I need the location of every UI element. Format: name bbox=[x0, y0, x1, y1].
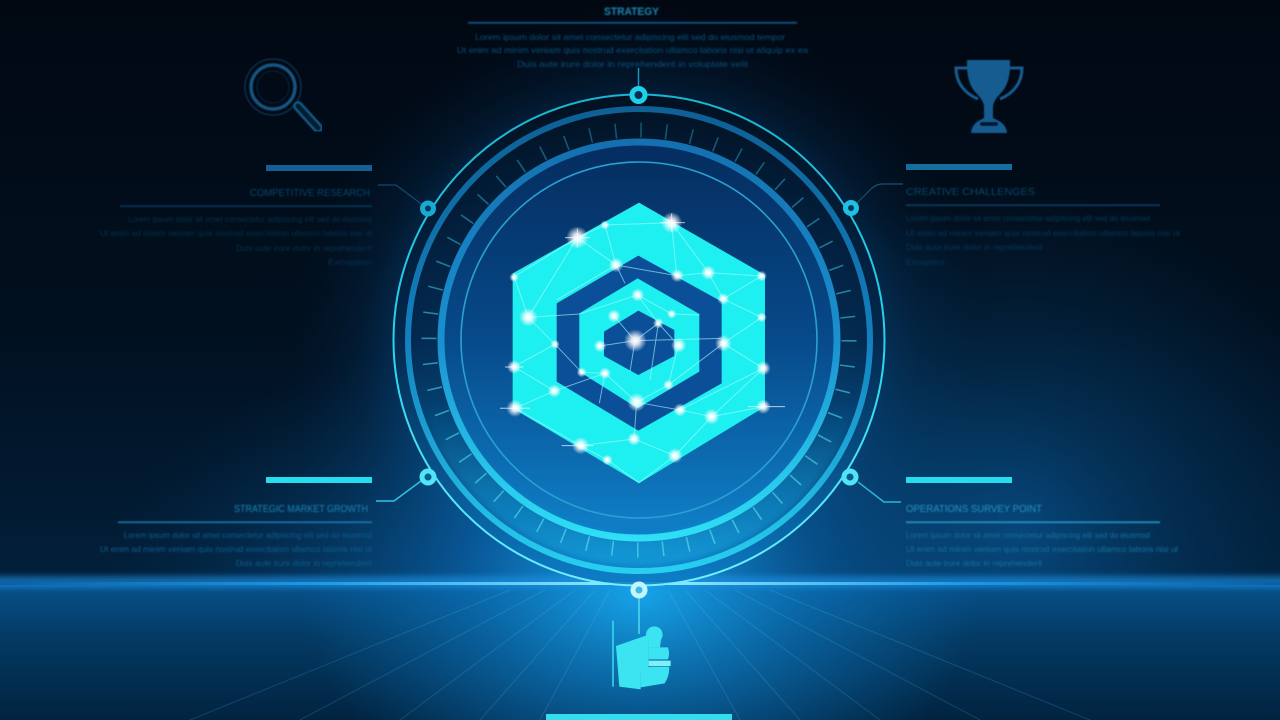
body text: Ut enim ad minim veniam quis nostrud exercitation ullamco laboris nisi ut bbox=[906, 228, 1181, 238]
body text: Duis aute irure dolor in reprehenderit bbox=[236, 558, 373, 568]
body text: Lorem ipsum dolor sit amet consectetur adipiscing elit sed do eiusmod bbox=[906, 213, 1150, 223]
spark flares bbox=[500, 213, 785, 446]
connector and node: bottom left bbox=[376, 471, 434, 501]
body text bbox=[457, 32, 808, 69]
body text bbox=[906, 213, 1181, 267]
body text bbox=[100, 214, 373, 267]
top block: strategy bbox=[457, 6, 808, 69]
hexagon network logo bbox=[500, 203, 785, 483]
body text: Excepteur bbox=[906, 257, 945, 267]
icon: magnifying glass bbox=[245, 59, 318, 128]
body text: Duis aute irure dolor in reprehenderit bbox=[906, 242, 1044, 252]
body text: Lorem ipsum dolor sit amet consectetur adipiscing elit sed do eiusmod tempor bbox=[475, 32, 785, 42]
connector and node: bottom right bbox=[844, 471, 901, 502]
body text: Duis aute irure dolor in reprehenderit bbox=[236, 243, 373, 253]
body text: Duis aute irure dolor in reprehenderit in voluptate velit bbox=[517, 59, 749, 69]
body text bbox=[906, 530, 1179, 568]
outer thin ring bbox=[394, 94, 884, 586]
heading: STRATEGY bbox=[604, 6, 660, 18]
lower ring glow bbox=[427, 128, 851, 552]
second ring bbox=[408, 109, 870, 571]
body text: Lorem ipsum dolor sit amet consectetur adipiscing elit sed do eiusmod bbox=[124, 530, 372, 540]
central dial bbox=[394, 94, 884, 586]
body text bbox=[100, 530, 373, 568]
body text: Ut enim ad minim veniam quis nostrud exercitation ullamco laboris nisi ut bbox=[100, 228, 373, 238]
panel: bottom left bbox=[100, 477, 373, 568]
floor with perspective grid bbox=[0, 576, 1280, 720]
heading: COMPETITIVE RESEARCH bbox=[250, 188, 370, 199]
horizon beam bbox=[0, 576, 1280, 588]
inner thin ring bbox=[461, 162, 817, 518]
connector and node: bottom bbox=[633, 584, 645, 634]
body text: Ut enim ad minim veniam quis nostrud exercitation ullamco laboris nisi ut bbox=[100, 544, 373, 554]
connector and node: top left bbox=[378, 185, 434, 214]
panel: top left bbox=[100, 165, 373, 267]
mesh lines bbox=[514, 223, 763, 483]
body text: Duis aute irure dolor in reprehenderit bbox=[906, 558, 1043, 568]
body text: Lorem ipsum dolor sit amet consectetur adipiscing elit sed do eiusmod bbox=[128, 214, 372, 224]
thick inner ring bbox=[441, 142, 837, 538]
body text: Ut enim ad minim veniam quis nostrud exercitation ullamco laboris nisi ut bbox=[906, 544, 1179, 554]
body text: Ut enim ad minim veniam quis nostrud exercitation ullamco laboris nisi ut aliquip ex ea bbox=[457, 45, 808, 55]
glowing nodes bbox=[506, 212, 771, 465]
panel: top right bbox=[906, 164, 1181, 267]
heading: OPERATIONS SURVEY POINT bbox=[906, 504, 1042, 515]
tick ring bbox=[429, 130, 849, 550]
connector and node: top bbox=[632, 68, 645, 102]
connector and node: top right bbox=[846, 184, 903, 214]
heading: STRATEGIC MARKET GROWTH bbox=[234, 504, 368, 515]
panel: bottom right bbox=[906, 477, 1179, 568]
body text: Excepteur bbox=[328, 257, 372, 267]
heading: CREATIVE CHALLENGES bbox=[906, 187, 1035, 198]
icon: trophy bbox=[956, 60, 1022, 133]
body text: Lorem ipsum dolor sit amet consectetur adipiscing elit sed do eiusmod bbox=[906, 530, 1150, 540]
icon: thumbs up bbox=[612, 621, 671, 689]
bottom bar bbox=[546, 714, 732, 720]
